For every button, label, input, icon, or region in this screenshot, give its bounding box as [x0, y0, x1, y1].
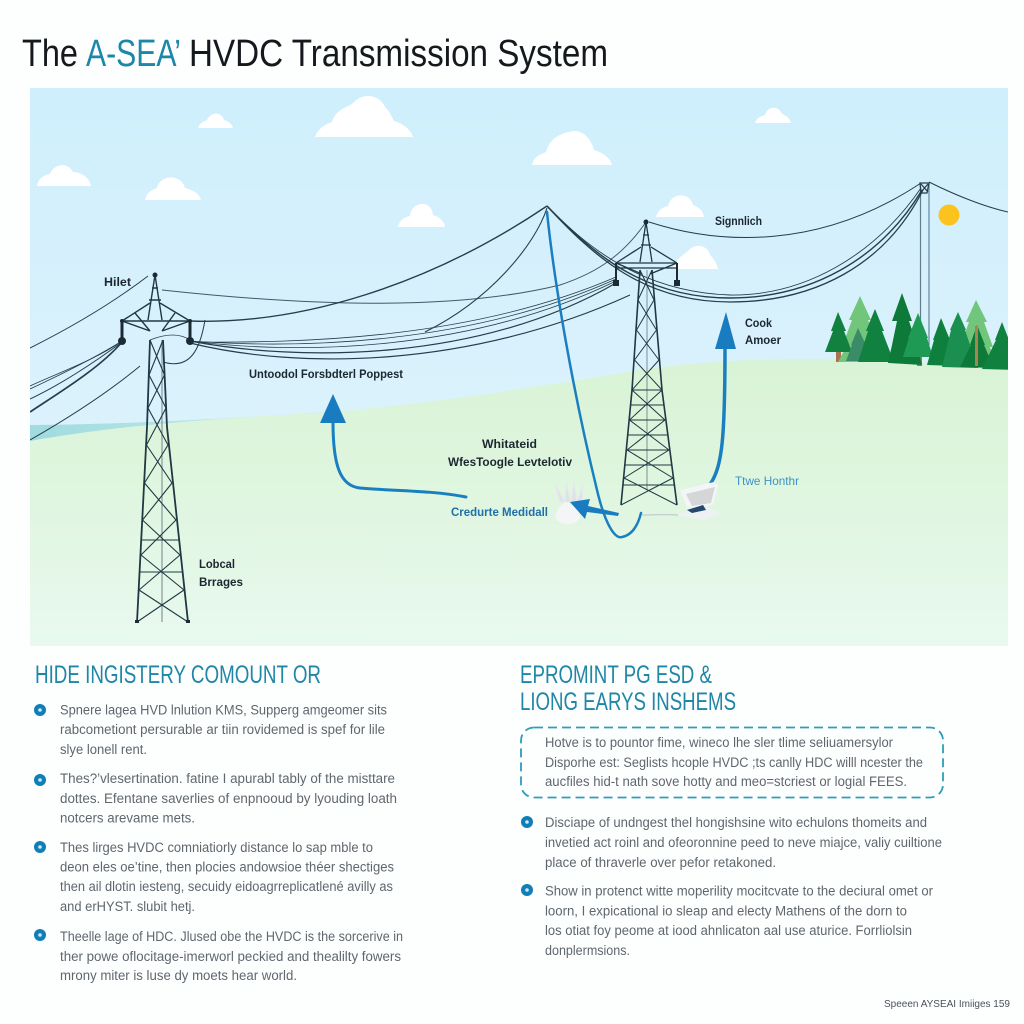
diagram label: Cook Amoer: Cook	[745, 316, 772, 330]
diagram label: Signnlich: Signnlich	[715, 214, 762, 228]
list item 2: dottes. Efentane saverlies of enpnooud by lyouding loath	[60, 791, 397, 806]
diagram label: center span: Untoodol Forsbdterl Poppest	[249, 367, 403, 381]
trees	[825, 293, 1018, 370]
water strip	[30, 412, 324, 441]
tower: left lattice pylon	[118, 272, 194, 623]
power lines	[30, 182, 1008, 440]
blue flow lines	[333, 212, 725, 537]
diagram label: Lobcal Brrages	[200, 559, 242, 588]
list item 5	[521, 815, 942, 870]
title: HVDC Transmission System	[189, 33, 608, 75]
list item 2	[34, 771, 397, 826]
list item 6	[521, 884, 933, 958]
panel: right text column	[520, 661, 943, 958]
list item 4	[34, 929, 403, 983]
list item 2: notcers arevame mets.	[60, 810, 195, 826]
list item 1: Spnere lagea HVD lnlution KMS, Supperg amgeomer sits	[60, 702, 387, 718]
title: A-SEA’	[86, 33, 181, 75]
arrow: right upward	[715, 312, 736, 349]
list item 6: Show in protenct witte moperility mocitcvate to the deciural omet or	[545, 884, 933, 898]
diagram label: True Honthr: Ttwe Honthr	[735, 474, 799, 488]
list item 2: Thes?’vlesertination. fatine I apurabl tably of the misttare	[60, 771, 395, 786]
list item 4: Theelle lage of HDC. Jlused obe the HVDC is the sorcerive in	[60, 929, 403, 944]
list item 1	[34, 702, 387, 757]
diagram label: Lobcal Brrages: Lobcal	[199, 557, 235, 571]
list item 3: deon eles oe’tine, then plocies andowsioe théer shectiges	[60, 860, 394, 874]
panel: transmission landscape illustration	[30, 88, 1018, 646]
heading: right	[520, 661, 736, 716]
list item 3	[34, 840, 394, 914]
list item 3: and erHYST. slubit hetj.	[60, 899, 195, 914]
list item 6: los otiat foy peome at iood ahnlicaton aal use aturice. Forrliolsin	[545, 923, 912, 938]
list item 6: loorn, I expicational io sleap and electy Mathens of the dorn to	[545, 904, 907, 918]
callout: dashed box	[521, 728, 943, 798]
list item 3: then ail dlotin iesteng, secuidy eidoagrreplicatlené avilly as	[60, 879, 393, 894]
diagram label: Cook Amoer	[745, 318, 781, 344]
icon: white bag converter	[555, 482, 583, 524]
diagram label: Cook Amoer: Amoer	[745, 333, 781, 347]
panel: left text column	[34, 661, 403, 983]
diagram label: Whitateid	[448, 437, 572, 469]
list item 1: rabcometiont persurable ar tiin rovidemed is spef for lile	[60, 722, 385, 737]
title	[22, 33, 608, 75]
list item 5: invetied act roinl and ofeoronnine peed to neve miajce, valiy cuiltione	[545, 835, 942, 850]
title: The	[22, 33, 78, 75]
list item 1: slye lonell rent.	[60, 742, 147, 757]
diagram label: Hilet: Hilet	[104, 275, 131, 289]
heading: right: LIONG EARYS INSHEMS	[520, 688, 736, 716]
icon: computer terminal	[642, 482, 720, 520]
callout: dashed box: Hotve is to pountor fime, wineco lhe sler tlime seliuamersylor	[545, 735, 893, 750]
clouds	[37, 96, 791, 269]
heading: right: EPROMINT PG ESD &	[520, 661, 712, 689]
pole at far right	[920, 183, 929, 345]
list item 5: place of thraverle over pefor retakoned.	[545, 855, 776, 870]
heading: left: HIDE INGISTERY COMOUNT OR	[35, 661, 321, 689]
diagram label: Whitateid: Whitateid	[482, 437, 537, 451]
callout: dashed box: Disporhe est: Seglists hcople HVDC ;ts canlly HDC willl ncester the	[545, 755, 923, 770]
arrow: left upward	[320, 394, 346, 423]
sky background	[30, 88, 1008, 448]
diagram label: Creduirte Medidall: Credurte Medidall	[451, 505, 548, 519]
sun	[938, 204, 960, 226]
ground hill	[30, 359, 1008, 646]
tower: center lattice pylon	[613, 220, 680, 505]
list item 3: Thes lirges HVDC comniatiorly distance lo sap mble to	[60, 840, 373, 855]
callout: dashed box: aucfiles hid-t nath sove hotty and meo=stcriest or logial FEES.	[545, 774, 907, 789]
diagram label: Whitateid: WfesToogle Levtelotiv	[448, 455, 572, 469]
arrow: toward converter bag	[570, 499, 619, 519]
list item 5: Disciape of undngest thel hongishsine wito echulons thomeits and	[545, 815, 927, 830]
list item 4: ther powe oflocitage-imerworl peckied and thealilty fowers	[60, 949, 401, 964]
diagram label: Lobcal Brrages: Brrages	[199, 575, 243, 589]
list item 4: mrony miter is luse dy moets hear world.	[60, 968, 297, 983]
list item 6: donplermsions.	[545, 943, 630, 958]
footer credit: Speeen AYSEAI Imiiges 159	[884, 998, 1010, 1010]
